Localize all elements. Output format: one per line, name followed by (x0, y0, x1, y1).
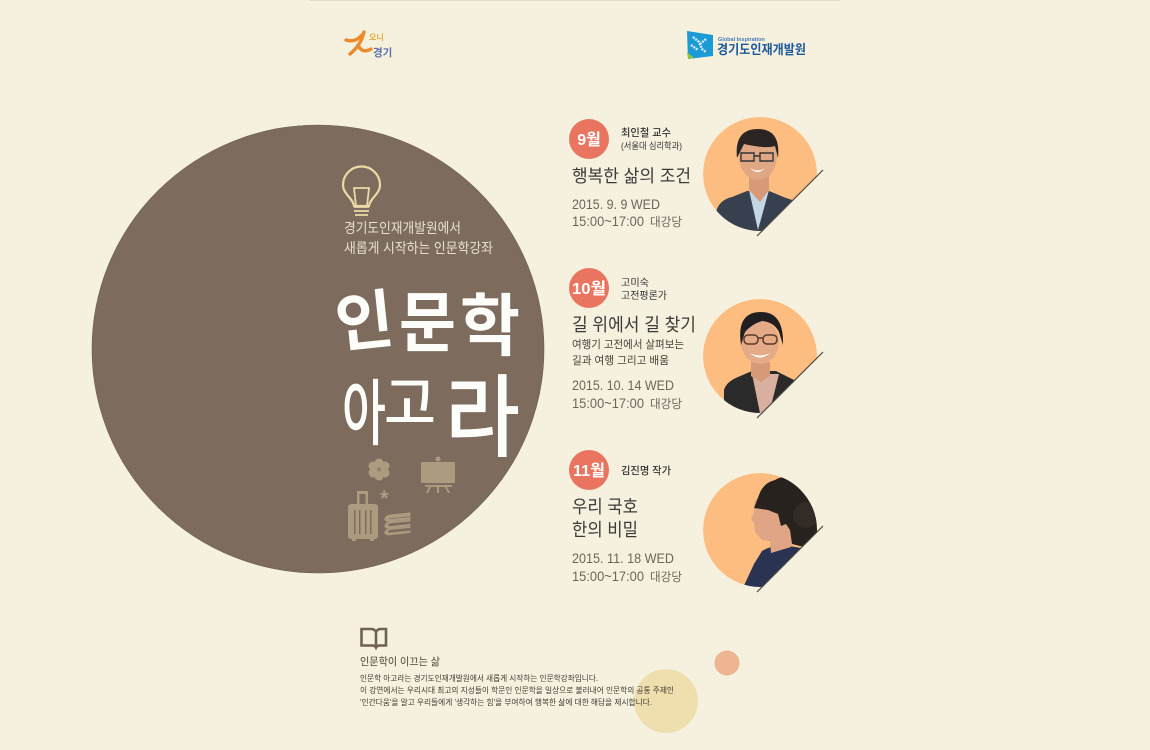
lecture subtitle: 길과 여행 그리고 배움 (572, 354, 669, 367)
lecturer: (서울대 심리학과) (621, 141, 682, 151)
section: about the lecture (360, 629, 674, 707)
date and time: 대강당 (650, 215, 682, 229)
diagonal line (757, 352, 823, 418)
intro text: 새롭게 시작하는 인문학강좌 (344, 240, 493, 256)
title: brush lettering: 라 (445, 345, 520, 475)
decorative circle: pale gold (634, 669, 698, 733)
title: brush lettering: 학 (460, 271, 520, 370)
lecture title (572, 497, 638, 540)
body text: 인문학 아고라는 경기도인재개발원에서 새롭게 시작하는 인문학강좌입니다. (360, 673, 598, 683)
body text (360, 673, 674, 707)
logo: festive Gyeonggi: 경기 (373, 46, 392, 59)
lecture title: 길 위에서 길 찾기 (572, 315, 696, 335)
panel: main brown circle (92, 125, 544, 573)
date and time: 15:00~17:00 (572, 213, 644, 229)
logo: festive Gyeonggi: 오니 (369, 32, 384, 42)
title: brush lettering (330, 268, 520, 475)
body text: 이 강연에서는 우리시대 최고의 지성들이 학문인 인문학을 일상으로 불러내어 인문학의 공통 주제인 (360, 685, 674, 695)
date and time (572, 196, 682, 229)
icon: open book (362, 629, 386, 648)
icon: asterisk: * (380, 486, 389, 511)
month badge: 10월 (572, 280, 606, 298)
session: November (569, 450, 823, 592)
portrait: man in profile (703, 473, 819, 592)
decorative circle: salmon (714, 650, 740, 676)
date and time: 대강당 (650, 570, 682, 584)
section heading: 인문학이 이끄는 삶 (360, 655, 440, 668)
month badge (569, 450, 609, 490)
lecturer: 최인철 교수 (621, 126, 671, 139)
title: brush lettering: 고 (384, 357, 436, 441)
logo: festive Gyeonggi (346, 32, 392, 59)
date and time: 2015. 10. 14 WED (572, 377, 674, 393)
lecture title: 한의 비밀 (572, 520, 638, 540)
date and time: 2015. 9. 9 WED (572, 196, 660, 212)
month badge (569, 119, 609, 159)
icon: easel board (421, 456, 455, 493)
portrait: man with glasses (703, 117, 817, 236)
lecturer (621, 126, 682, 151)
title: brush lettering: 인 (330, 268, 398, 366)
date and time (572, 550, 682, 584)
date and time: 대강당 (650, 397, 682, 411)
month badge: 9월 (577, 131, 601, 149)
date and time: 15:00~17:00 (572, 395, 644, 411)
logo: Gyeonggi Human Resources Institute (687, 31, 806, 59)
body text: '인간다움'을 알고 우리들에게 '생각하는 힘'을 부여하여 행복한 삶에 대한 해답을 제시합니다. (360, 697, 652, 707)
diagonal line (757, 526, 823, 592)
icon: flower (368, 458, 390, 480)
logo: Gyeonggi Human Resources Institute: 경기도인재개발원 (717, 42, 806, 57)
lecture title: 우리 국호 (572, 497, 638, 517)
lecture subtitle (572, 338, 684, 367)
intro text (344, 220, 493, 256)
title: brush lettering: 문 (399, 270, 456, 366)
icon: suitcase (348, 491, 378, 541)
portrait: woman with glasses (703, 299, 817, 418)
title: brush lettering: 아 (342, 355, 386, 460)
session: October (569, 268, 823, 418)
icon: light bulb (343, 166, 380, 215)
lecture title: 행복한 삶의 조건 (572, 166, 691, 186)
date and time: 15:00~17:00 (572, 568, 644, 584)
lecturer (621, 277, 667, 302)
date and time: 2015. 11. 18 WED (572, 550, 674, 566)
lecturer: 김진명 작가 (621, 465, 671, 477)
lecturer: 고미숙 (621, 277, 649, 289)
icon: stack of books (385, 513, 410, 535)
month badge (569, 268, 609, 308)
lecturer: 고전평론가 (621, 290, 667, 302)
date and time (572, 377, 682, 411)
session: September (569, 117, 823, 236)
logo: Gyeonggi Human Resources Institute: Global Inspiration (718, 37, 765, 43)
month badge: 11월 (573, 462, 605, 480)
intro text: 경기도인재개발원에서 (344, 220, 461, 236)
top rule (310, 0, 840, 1)
diagonal line (757, 170, 823, 236)
lecture subtitle: 여행기 고전에서 살펴보는 (572, 338, 684, 351)
